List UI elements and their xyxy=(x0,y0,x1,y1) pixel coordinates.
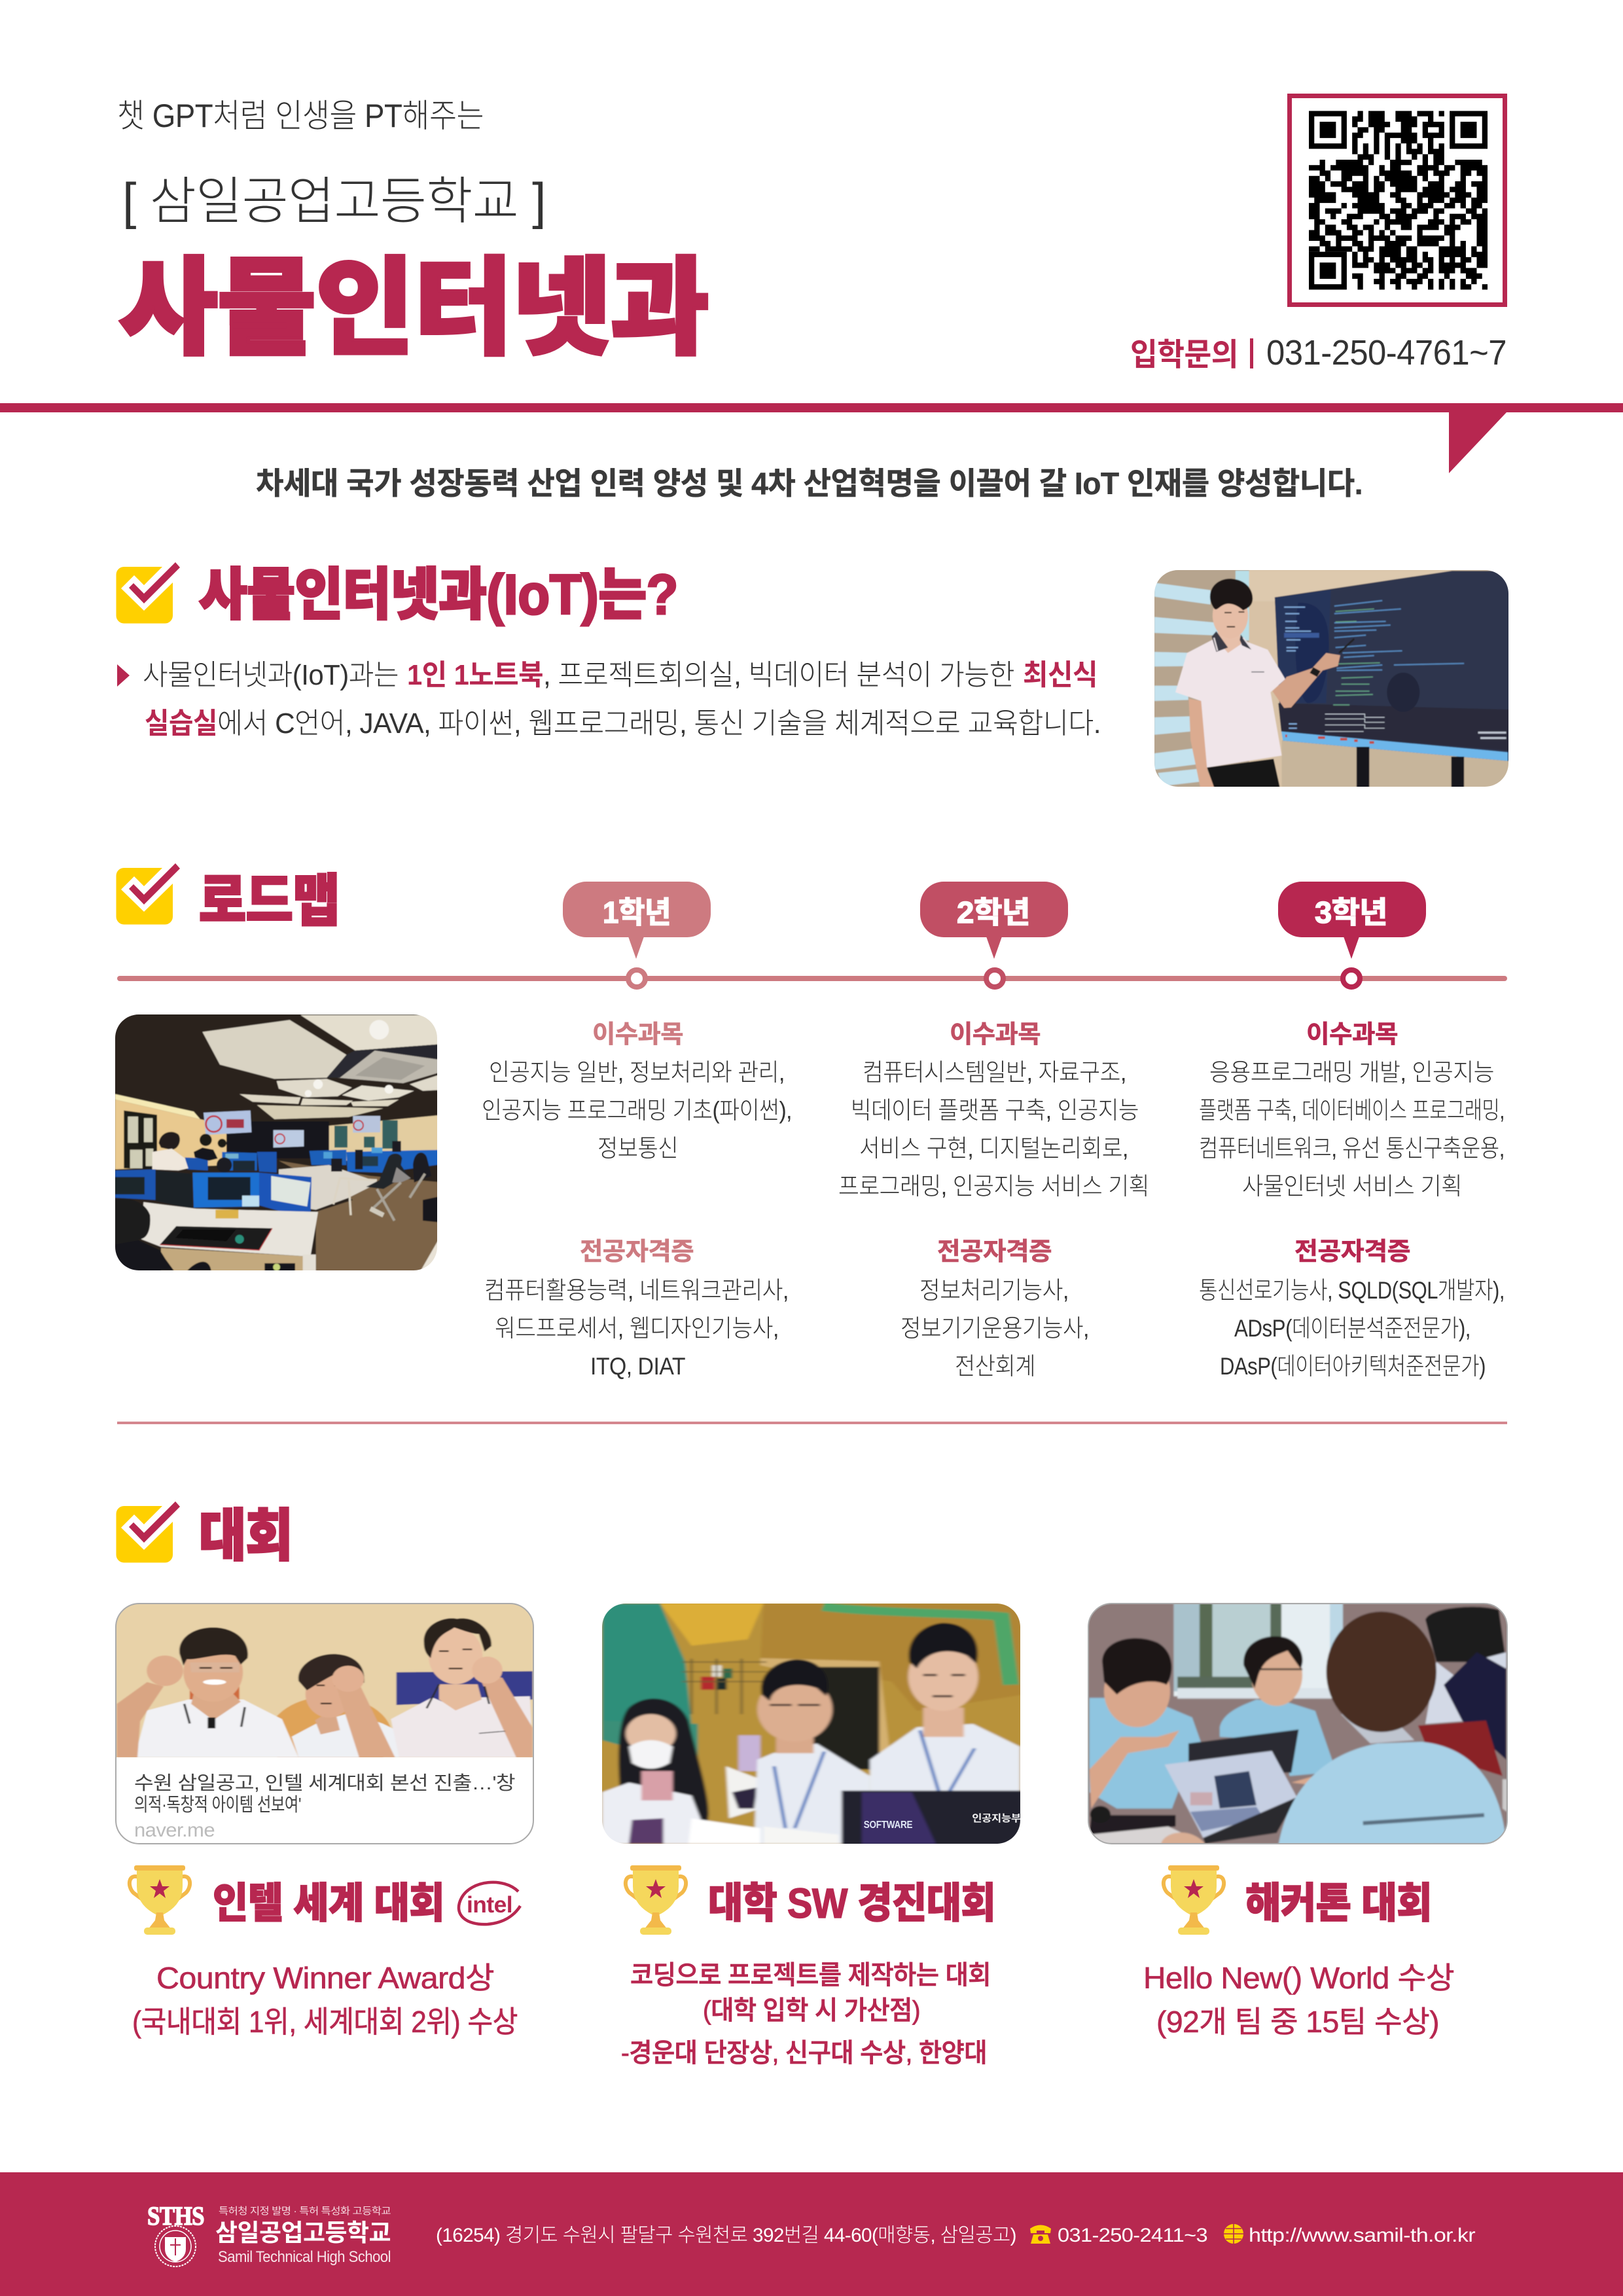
icon: trophy 1 xyxy=(130,1865,190,1935)
icon: check box (IoT section) xyxy=(116,562,180,623)
card: hackathon photo xyxy=(1084,1600,1517,1848)
text block: hackathon result: Hello New() World 수상 xyxy=(1143,1961,1454,1995)
heading: courses grade 1: 이수과목 xyxy=(592,1021,683,1049)
icon: phone xyxy=(1030,2225,1051,2244)
admissions contact: 031-250-4761~7 xyxy=(1266,333,1507,372)
courses: grade 3: 사물인터넷 서비스 기획 xyxy=(1242,1173,1462,1200)
text block: university SW result: (대학 입학 시 가산점) xyxy=(703,1996,920,2025)
heading: contests: 대회 xyxy=(199,1505,293,1568)
courses: grade 2: 빅데이터 플랫폼 구축, 인공지능 xyxy=(851,1097,1139,1124)
text block: Intel result: Country Winner Award상 xyxy=(156,1961,494,1995)
school name lines: 특허청 지정 발명 · 특허 특성화 고등학교 xyxy=(219,2206,391,2217)
icon: bullet arrow xyxy=(117,664,130,687)
icon: check box (roadmap section) xyxy=(116,863,180,924)
heading: IoT section: 사물인터넷과(IoT)는? xyxy=(199,564,678,626)
text block: IoT description: 최신식 xyxy=(1023,659,1097,691)
courses: grade 2: 정보기기운용기능사, xyxy=(901,1315,1089,1342)
photo: computer lab xyxy=(109,1008,444,1276)
text block: IoT description: 1인 1노트북 xyxy=(407,659,543,691)
heading: courses grade 2: 이수과목 xyxy=(950,1021,1041,1049)
footer band: 삼일공업고등학교 xyxy=(215,2219,391,2246)
subtitle: 챗 GPT처럼 인생을 PT해주는 xyxy=(117,98,484,134)
courses: grade 3 xyxy=(1199,1021,1505,1380)
courses: grade 3: 플랫폼 구축, 데이터베이스 프로그래밍, xyxy=(1199,1097,1505,1124)
contest title: Intel: 인텔 세계 대회 xyxy=(213,1880,444,1927)
admissions contact: 입학문의 xyxy=(1130,338,1238,372)
text block: Intel result: (국내대회 1위, 세계대회 2위) 수상 xyxy=(132,2005,518,2039)
text block: IoT description: 실습실 xyxy=(145,708,217,740)
school name: [ 삼일공업고등학교 ] xyxy=(122,172,546,230)
heading: roadmap: 로드맵 xyxy=(199,870,340,933)
text block: university SW result xyxy=(621,1961,991,2068)
contest title: hackathon: 해커톤 대회 xyxy=(1245,1880,1432,1927)
header: school title block xyxy=(117,98,709,368)
text block: Intel result xyxy=(132,1961,518,2039)
text block: IoT description: 사물인터넷과(IoT)과는 xyxy=(143,659,399,691)
address: (16254) 경기도 수원시 팔달구 수원천로 392번길 44-60(매향동, 삼일공고) xyxy=(436,2225,1016,2246)
grade 1 marker: 1학년 xyxy=(603,895,671,929)
backdrop lettering xyxy=(864,1813,1020,1828)
grade 1 marker xyxy=(563,882,711,987)
courses: grade 3: 컴퓨터네트워크, 유선 통신구축운용, xyxy=(1199,1135,1505,1162)
text block: IoT description xyxy=(117,659,1101,740)
news headline: 수원 삼일공고, 인텔 세계대회 본선 진출…'창 xyxy=(134,1772,515,1794)
courses: grade 1: ITQ, DIAT xyxy=(590,1353,685,1380)
card: Intel news photo xyxy=(111,1597,543,1844)
icon: check box (contest section) xyxy=(116,1501,180,1563)
heading: certificates grade 2: 전공자격증 xyxy=(937,1238,1052,1266)
footer band: Samil Technical High School xyxy=(218,2248,391,2266)
courses: grade 3: 통신선로기능사, SQLD(SQL개발자), xyxy=(1199,1277,1505,1304)
contest title: university SW: 대학 SW 경진대회 xyxy=(708,1880,995,1927)
icon: intel logo: intel xyxy=(467,1892,512,1918)
courses: grade 2: 정보처리기능사, xyxy=(919,1277,1069,1304)
phone number: 031-250-2411~3 xyxy=(1058,2225,1207,2246)
school emblem xyxy=(155,2226,196,2267)
courses: grade 2 xyxy=(838,1021,1149,1380)
text block: IoT description: 에서 C언어, JAVA, 파이썬, 웹프로그래밍, 통신 기술을 체계적으로 교육합니다. xyxy=(217,708,1101,740)
source label: naver.me xyxy=(134,1820,215,1841)
courses: grade 2: 전산회계 xyxy=(955,1353,1035,1380)
text block: university SW result: 코딩으로 프로젝트를 제작하는 대회 xyxy=(630,1961,991,1990)
courses: grade 3: 응용프로그래밍 개발, 인공지능 xyxy=(1209,1059,1494,1086)
heading: courses grade 3: 이수과목 xyxy=(1306,1021,1398,1049)
school logo: STHS: STHS xyxy=(147,2201,204,2231)
text block: university SW result: -경운대 단장상, 신구대 수상, 한양대 xyxy=(621,2039,987,2068)
courses: grade 2: 프로그래밍, 인공지능 서비스 기획 xyxy=(838,1173,1149,1200)
courses: grade 3: ADsP(데이터분석준전문가), xyxy=(1234,1315,1471,1342)
courses: grade 1 xyxy=(482,1021,792,1380)
tagline: 차세대 국가 성장동력 산업 인력 양성 및 4차 산업혁명을 이끌어 갈 IoT 인재를 양성합니다. xyxy=(256,466,1363,501)
icon: trophy 3 xyxy=(1164,1865,1224,1935)
heading: certificates grade 1: 전공자격증 xyxy=(580,1238,694,1266)
courses: grade 1: 워드프로세서, 웹디자인기능사, xyxy=(495,1315,779,1342)
courses: grade 1: 인공지능 일반, 정보처리와 관리, xyxy=(489,1059,785,1086)
courses: grade 3: DAsP(데이터아키텍처준전문가) xyxy=(1220,1353,1486,1380)
grade 2 marker xyxy=(920,882,1068,987)
department title: 사물인터넷과 xyxy=(119,249,709,368)
backdrop lettering: SOFTWARE xyxy=(864,1819,912,1831)
website: http://www.samil-th.or.kr xyxy=(1249,2225,1476,2246)
grade 2 marker: 2학년 xyxy=(957,895,1030,929)
icon: globe xyxy=(1224,2224,1243,2244)
QR code xyxy=(1289,96,1505,305)
text block: hackathon result: (92개 팀 중 15팀 수상) xyxy=(1156,2005,1439,2039)
card: Intel news photo: 의적·독창적 아이템 선보여' xyxy=(134,1794,301,1816)
photo: student presenting code on screen xyxy=(1149,564,1516,793)
grade 3 marker: 3학년 xyxy=(1315,895,1387,929)
grade 3 marker xyxy=(1278,882,1426,987)
header rule with pennant xyxy=(0,403,1623,473)
icon: intel logo xyxy=(459,1882,520,1924)
footer band xyxy=(0,2172,1623,2296)
heading: certificates grade 3: 전공자격증 xyxy=(1294,1238,1410,1266)
timeline bar xyxy=(117,976,1507,981)
courses: grade 1: 정보통신 xyxy=(597,1135,678,1162)
courses: grade 2: 컴퓨터시스템일반, 자료구조, xyxy=(863,1059,1126,1086)
card: university SW contest photo xyxy=(602,1604,1020,1844)
admissions contact xyxy=(1130,333,1507,372)
courses: grade 1: 인공지능 프로그래밍 기초(파이썬), xyxy=(482,1097,792,1124)
icon: trophy 2 xyxy=(626,1865,686,1935)
text block: IoT description: , 프로젝트회의실, 빅데이터 분석이 가능한 xyxy=(543,659,1014,691)
courses: grade 1: 컴퓨터활용능력, 네트워크관리사, xyxy=(484,1277,789,1304)
text block: hackathon result xyxy=(1143,1961,1454,2039)
courses: grade 2: 서비스 구현, 디지털논리회로, xyxy=(859,1135,1128,1162)
